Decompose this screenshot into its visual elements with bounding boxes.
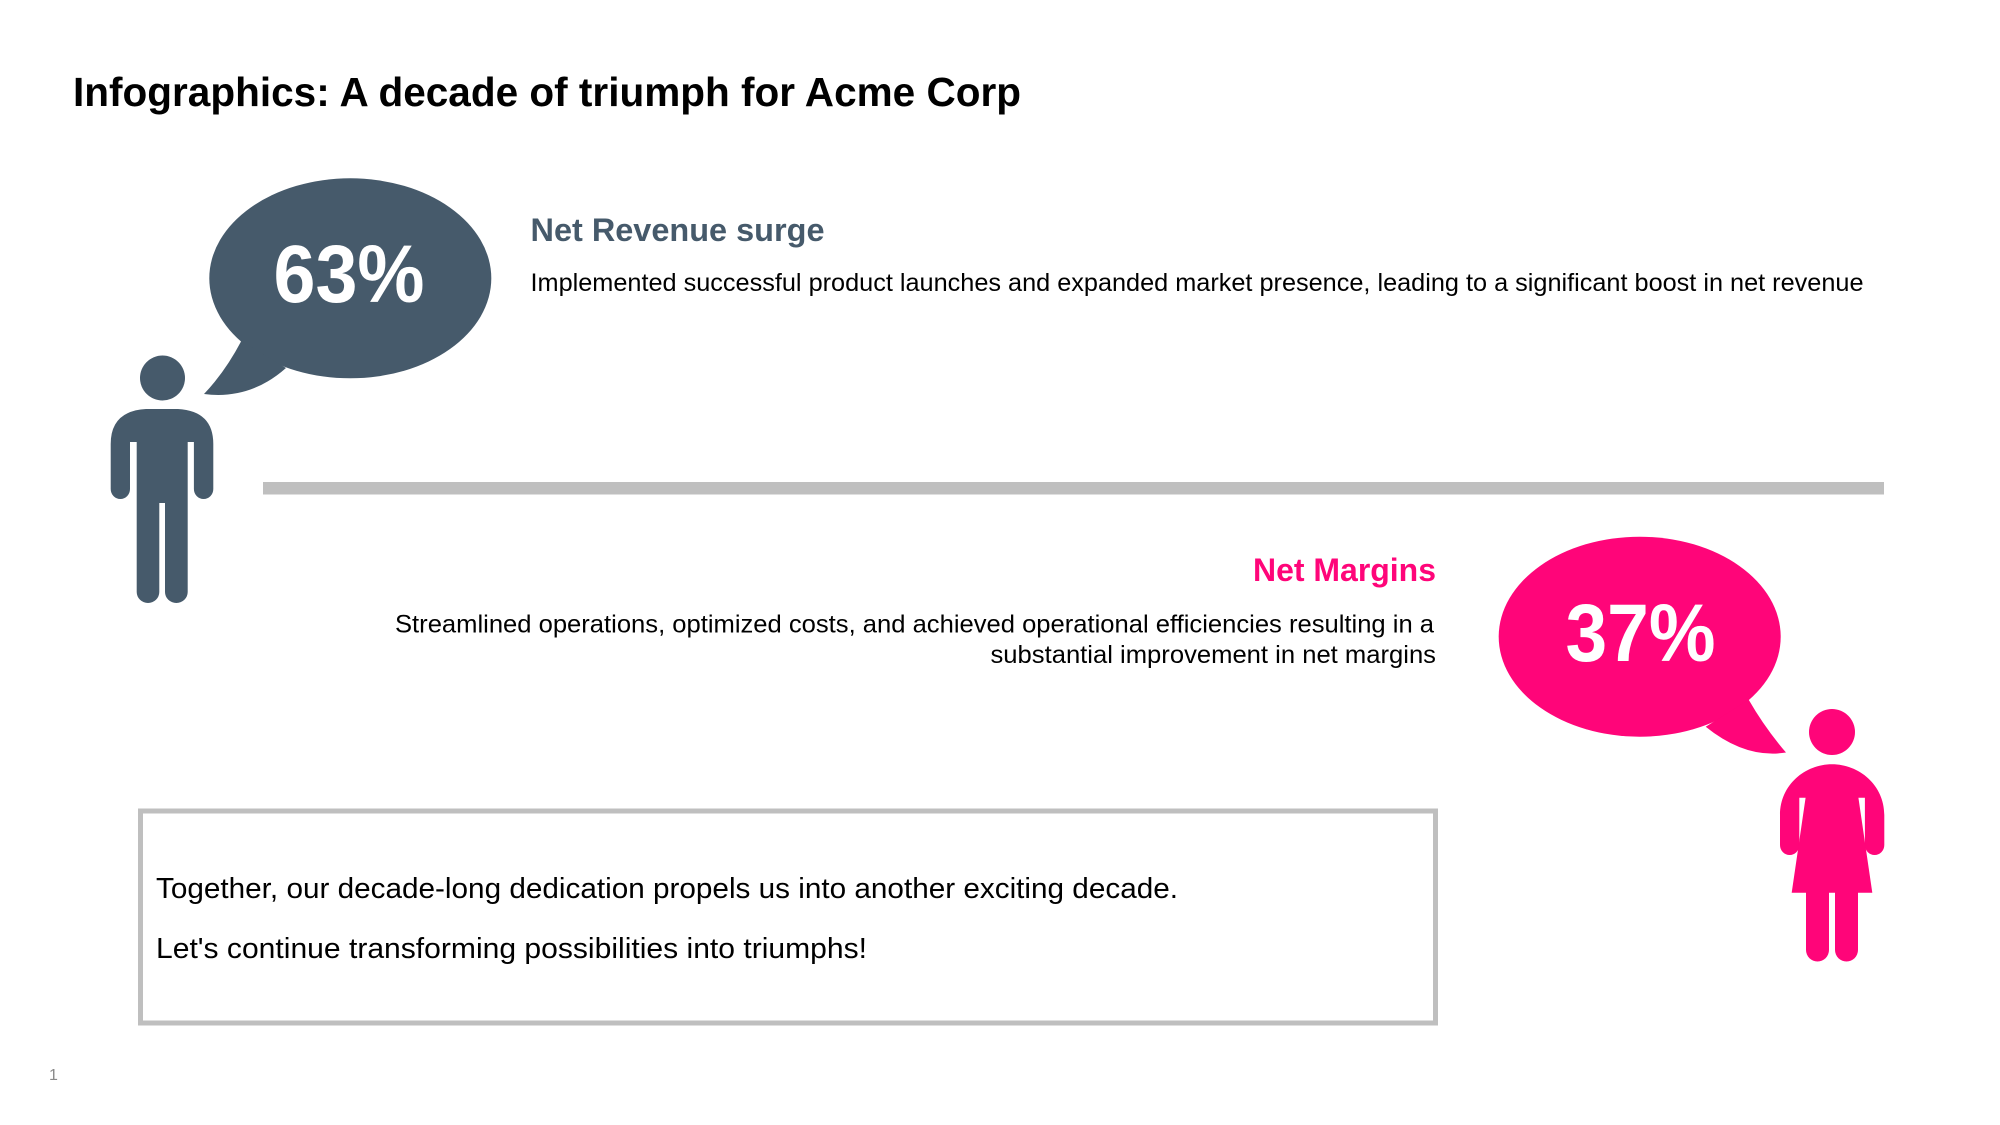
text: net margins description xyxy=(395,610,1436,669)
text: net revenue description: Implemented successful product launches and expanded market presence, leading to a significant boost in net revenue xyxy=(530,269,1864,297)
callout text xyxy=(156,873,1178,965)
speech bubble: 37%: 37% xyxy=(1566,588,1716,679)
text: net margins description: Streamlined operations, optimized costs, and achieved operational efficiencies resulting in a xyxy=(395,610,1434,638)
callout box xyxy=(140,811,1436,1023)
icon: woman xyxy=(1780,709,1884,962)
page number: 1 xyxy=(49,1067,58,1084)
panel: net revenue xyxy=(111,178,1864,603)
title: Infographics: A decade of triumph for Acme Corp xyxy=(73,69,1021,115)
panel: net margins xyxy=(395,537,1884,962)
callout text: Let's continue transforming possibilities into triumphs! xyxy=(156,933,867,965)
heading: net margins: Net Margins xyxy=(1253,552,1436,588)
icon: man xyxy=(111,356,213,603)
text: net margins description: substantial improvement in net margins xyxy=(990,641,1436,669)
callout text: Together, our decade-long dedication propels us into another exciting decade. xyxy=(156,873,1178,905)
speech bubble: 37% xyxy=(1499,537,1786,754)
heading: net revenue surge: Net Revenue surge xyxy=(530,212,824,248)
speech bubble: 63%: 63% xyxy=(274,229,424,320)
speech bubble: 63% xyxy=(204,178,491,395)
